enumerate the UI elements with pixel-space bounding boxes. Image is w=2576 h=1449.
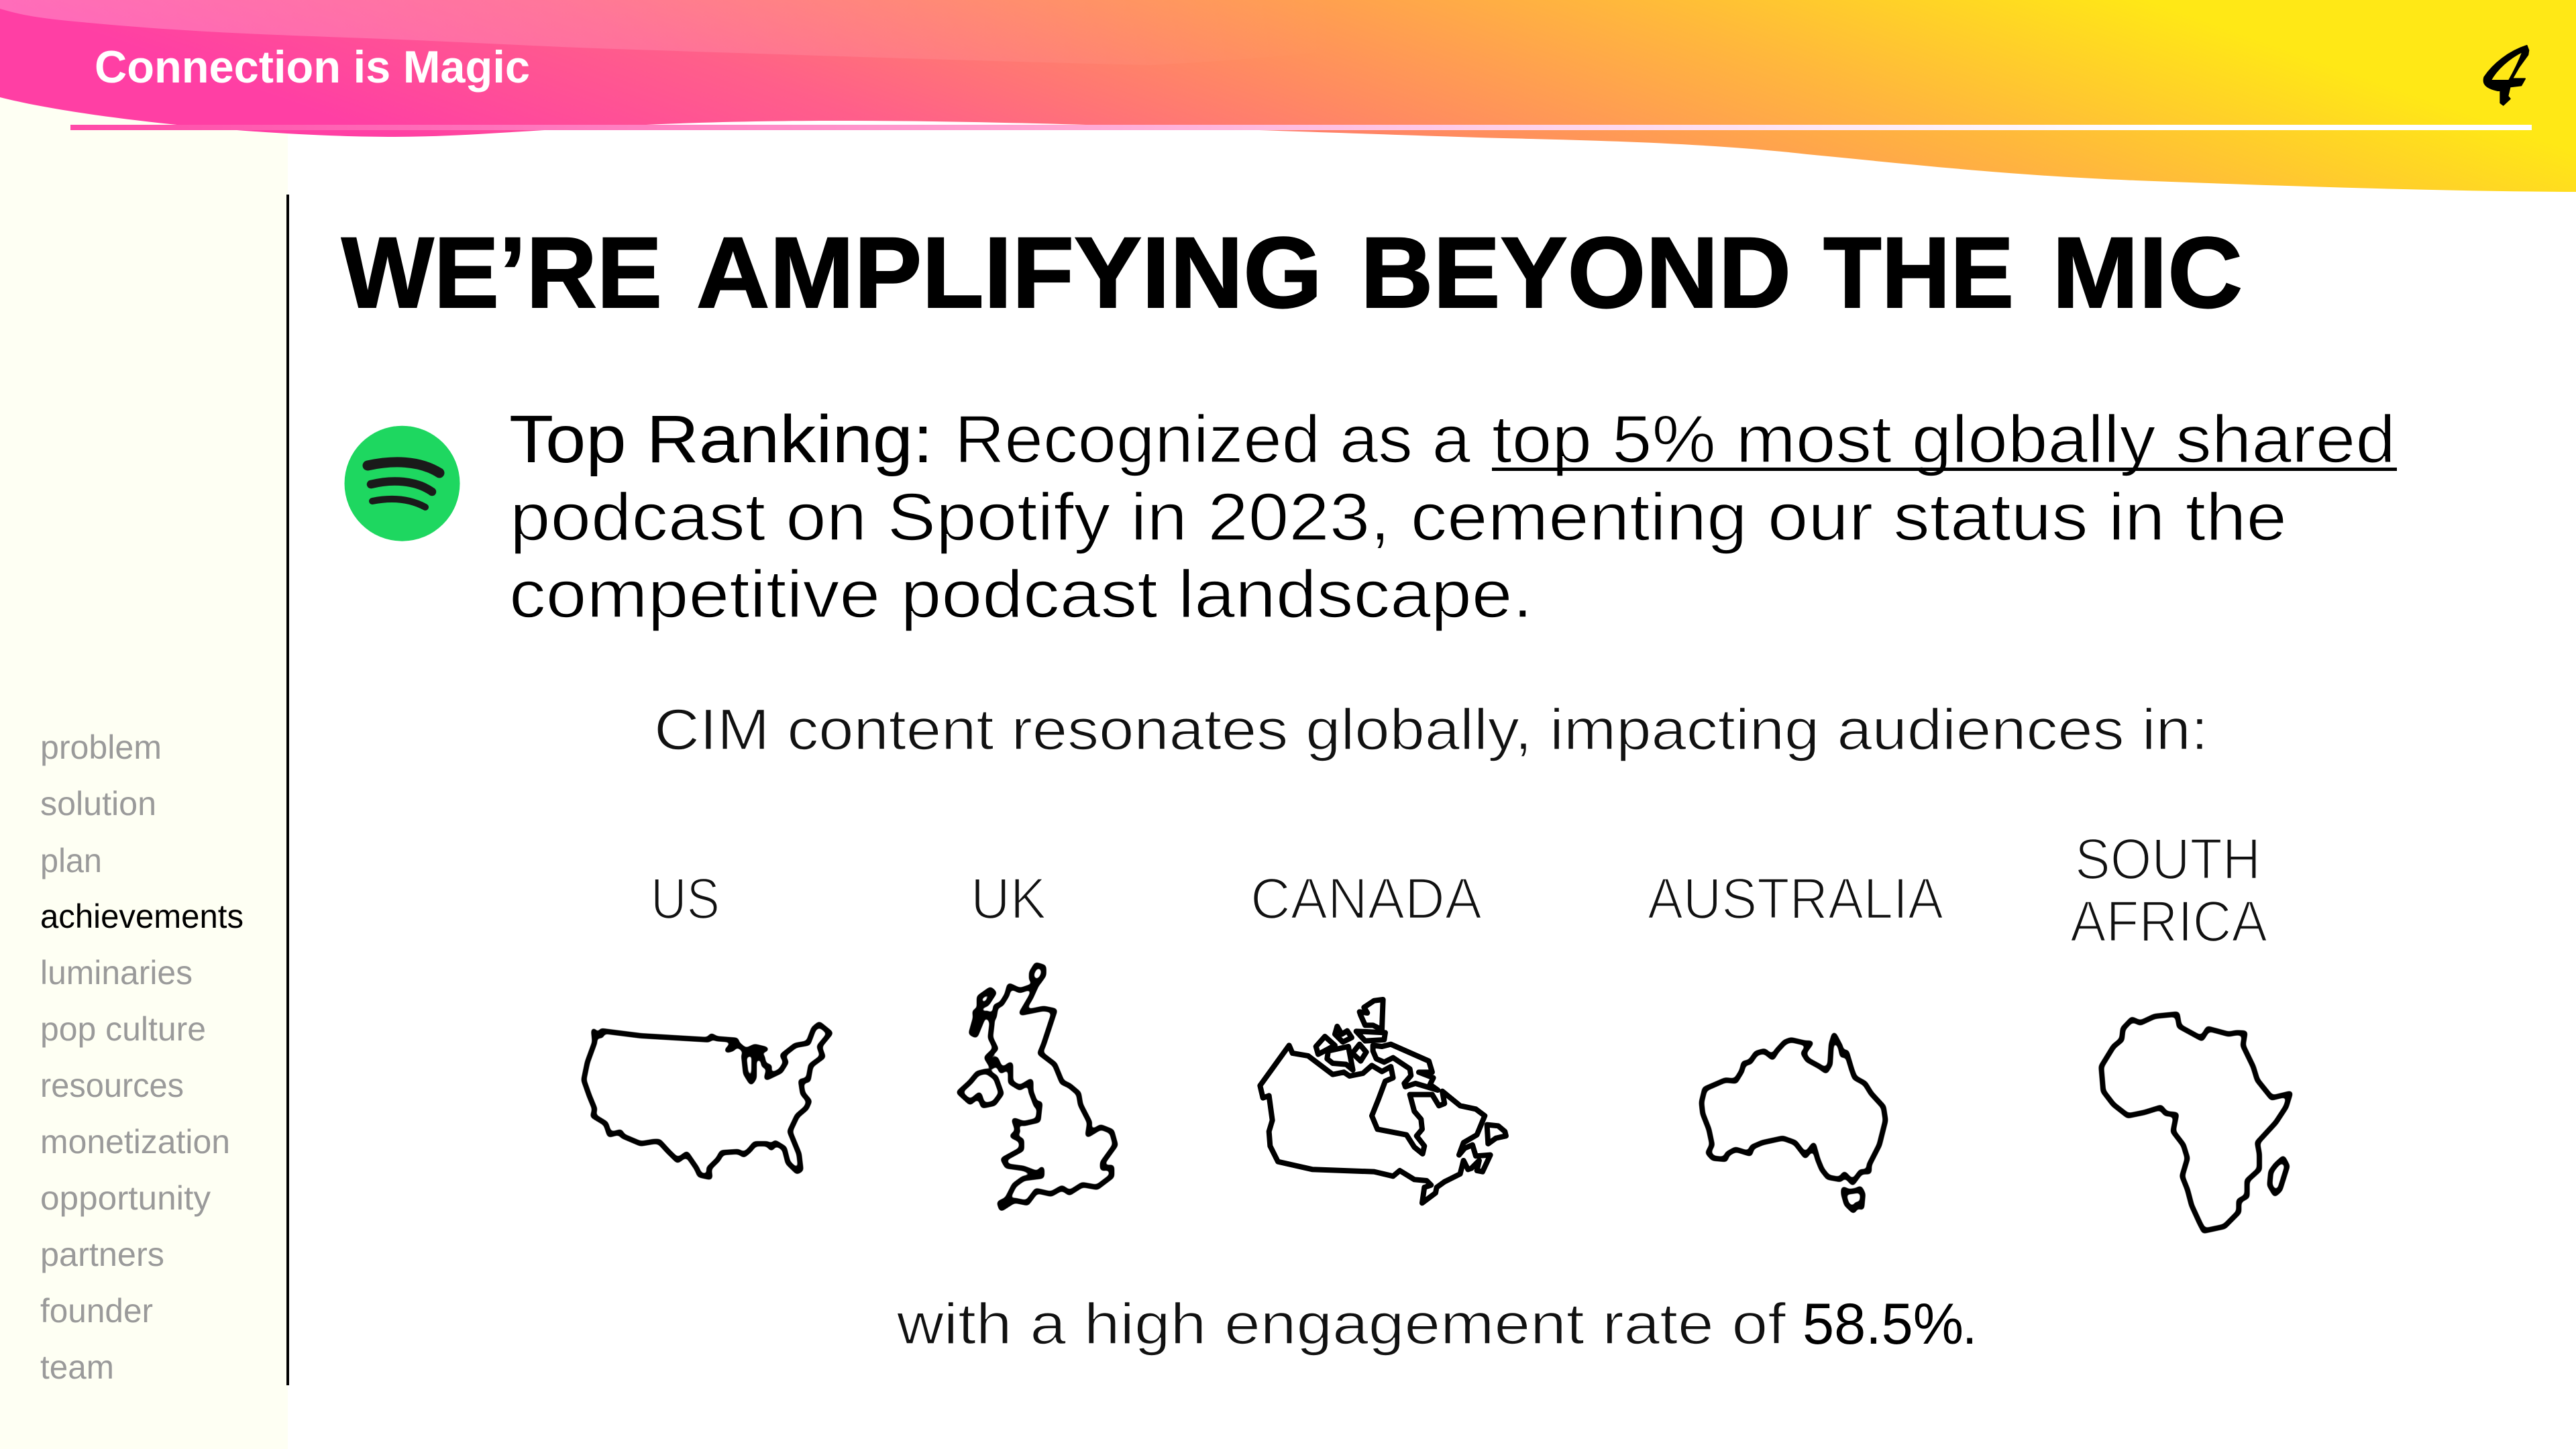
sidebar navigation: achievements	[40, 898, 244, 935]
label: South Africa: AFRICA	[2070, 890, 2268, 954]
label: Canada: CANADA	[1250, 867, 1483, 931]
text block: top ranking: Recognized as a	[955, 402, 1470, 477]
sidebar navigation: solution	[40, 785, 156, 822]
text block: top ranking: top 5% most globally shared	[1492, 402, 2396, 477]
icon: US map	[584, 1024, 830, 1177]
page number 4	[2484, 46, 2528, 105]
main title: MIC	[2052, 216, 2243, 329]
sidebar navigation: team	[40, 1348, 114, 1386]
sidebar navigation: plan	[40, 842, 102, 879]
header banner	[0, 0, 2576, 192]
main title: THE	[1823, 216, 2014, 329]
main title: AMPLIFYING	[696, 216, 1322, 329]
sidebar navigation: monetization	[40, 1123, 230, 1161]
icon: UK map	[959, 965, 1116, 1209]
sidebar navigation: opportunity	[40, 1179, 211, 1217]
sidebar navigation: partners	[40, 1236, 164, 1273]
main title	[341, 216, 2243, 329]
text: global audiences intro: CIM content resonates globally, impacting audiences in:	[654, 698, 2208, 762]
icon: Africa map	[2101, 1014, 2290, 1231]
text: engagement rate: 58.5%	[1803, 1292, 1964, 1356]
sidebar navigation: pop culture	[40, 1010, 206, 1048]
sidebar navigation: problem	[40, 729, 162, 766]
sidebar divider line	[286, 195, 289, 1385]
text: engagement rate: .	[1962, 1295, 1977, 1355]
sidebar navigation: resources	[40, 1067, 184, 1104]
label: South Africa: SOUTH	[2075, 827, 2261, 892]
label: South Africa	[2070, 827, 2268, 954]
header title: Connection is Magic	[95, 42, 530, 93]
icon: Australia map	[1701, 1035, 1886, 1211]
label: US: US	[651, 867, 720, 931]
sidebar navigation	[40, 729, 244, 1386]
sidebar panel	[0, 67, 288, 1449]
header gloss	[0, 0, 1368, 65]
label: Australia: AUSTRALIA	[1648, 867, 1944, 931]
main title: WE’RE	[341, 216, 662, 329]
text block: top ranking: Top Ranking:	[509, 402, 933, 477]
text block: top ranking	[509, 402, 2397, 632]
header rule	[70, 125, 2532, 130]
label: UK: UK	[971, 867, 1046, 931]
sidebar navigation: founder	[40, 1292, 153, 1330]
icon: spotify logo	[345, 426, 460, 541]
icon: Canada map	[1260, 1000, 1506, 1203]
text block: top ranking: competitive podcast landscape.	[509, 557, 1533, 632]
text block: top ranking: podcast on Spotify in 2023, cementing our status in the	[510, 480, 2287, 555]
text: engagement rate: with a high engagement rate of	[896, 1292, 1786, 1356]
main title: BEYOND	[1360, 216, 1791, 329]
sidebar navigation: luminaries	[40, 954, 193, 991]
